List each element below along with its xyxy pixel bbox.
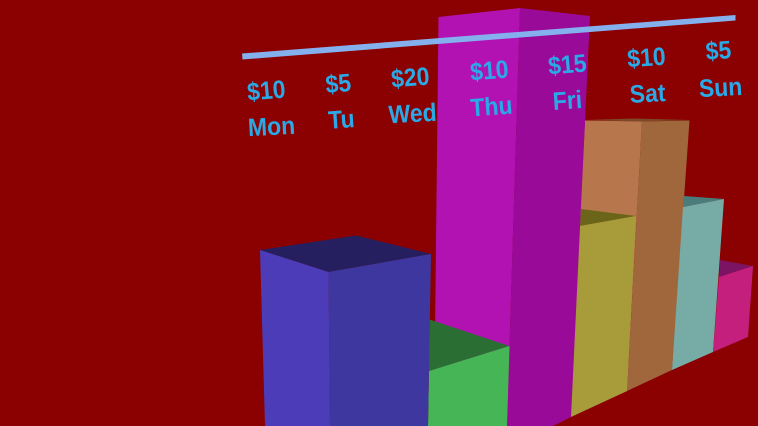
labels: Thu: Thu [469,92,513,123]
bar: Thu (magenta) [434,8,590,426]
labels: Thu [469,55,513,123]
labels: Sun: Sun [698,73,743,103]
labels: Sun [698,36,743,103]
labels: Sun: $5 [705,36,732,66]
bar: Fri (yellow) [571,209,636,417]
labels: Tu [324,69,356,135]
labels: Mon: $10 [246,75,287,107]
labels: Wed: Wed [388,99,437,130]
axis line [242,15,736,60]
bar: Wed (green) [428,319,510,426]
bar: Mon (blue) [260,236,431,426]
labels: Sat: Sat [629,79,666,109]
labels: Wed: $20 [390,62,431,94]
labels: Fri: $15 [547,49,588,81]
labels: Wed [388,62,437,130]
labels: Thu: $10 [469,55,510,87]
bar: Sat (orange) [570,118,690,417]
labels: Fri [547,49,588,116]
labels: Mon [246,75,296,143]
labels: Fri: Fri [552,86,583,116]
bar: pink [713,260,753,352]
bar: Sun (teal) [672,196,724,370]
labels: Sat [626,43,667,109]
labels: Tu: Tu [327,105,356,135]
labels: Tu: $5 [324,69,352,99]
labels: Sat: $10 [626,43,667,74]
labels: Mon: Mon [247,112,296,143]
